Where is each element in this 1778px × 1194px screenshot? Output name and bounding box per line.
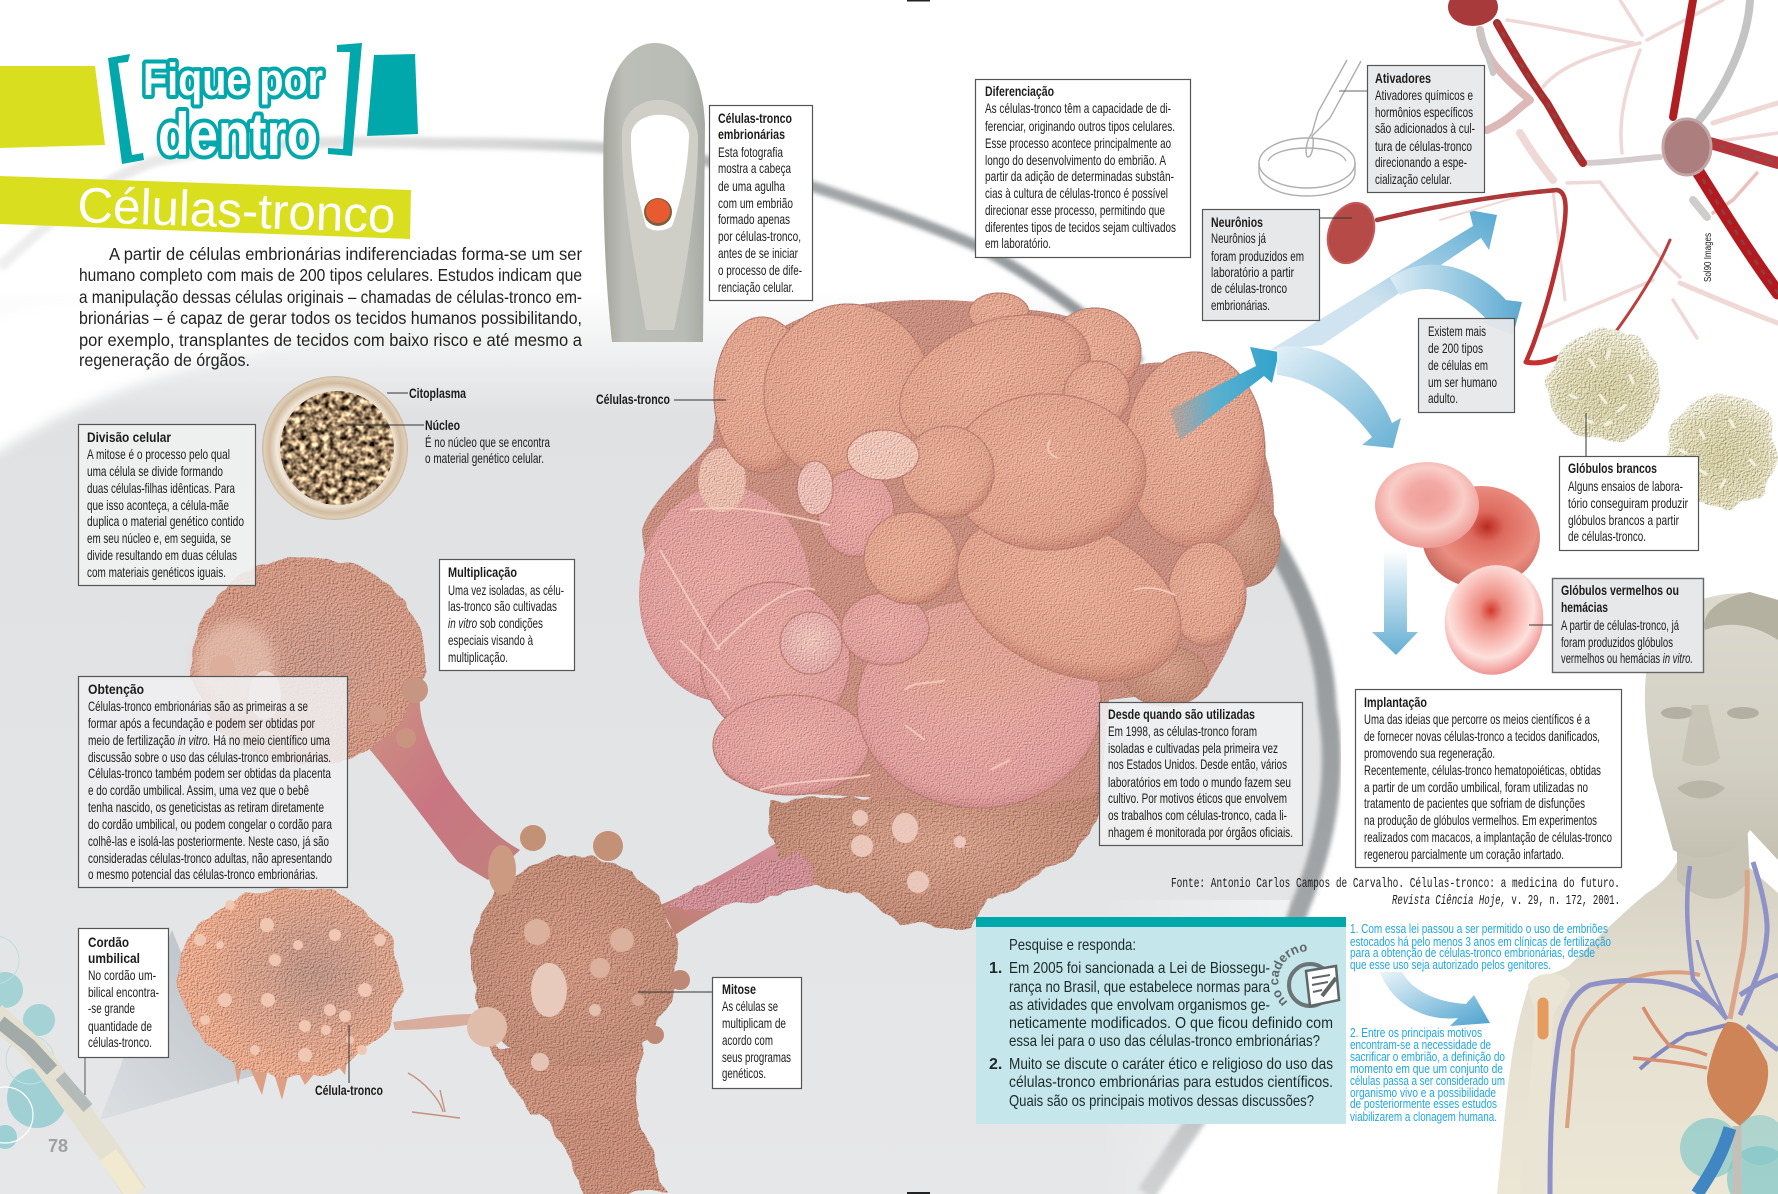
panel: Neurônios — [1202, 210, 1352, 320]
answer 2: 2. Entre os principais motivos — [1350, 1026, 1482, 1040]
panel: Desde quando são utilizadas: Em 1998, as células-tronco foram — [1108, 724, 1257, 739]
panel: Divisão celular: que isso aconteça, a célula-mãe — [87, 498, 229, 513]
answer 2: viabilizarem a clonagem humana. — [1350, 1110, 1497, 1124]
panel: Desde quando são utilizadas: cultivo. Por motivos éticos que envolvem — [1108, 791, 1287, 806]
panel: Neurônios: foram produzidos em — [1211, 249, 1304, 264]
panel: Ativadores: são adicionados à cul- — [1375, 121, 1475, 136]
panel: Desde quando são utilizadas — [1100, 702, 1302, 846]
panel: Cordão umbilical: No cordão um- — [88, 968, 156, 983]
icon: no caderno — [1271, 944, 1340, 1008]
panel: Obtenção: do cordão umbilical, ou podem congelar o cordão para — [88, 817, 332, 832]
panel: Implantação: Uma das ideias que percorre os meios científicos é a — [1364, 712, 1590, 727]
panel: Existem mais de 200 tipos — [1418, 318, 1514, 412]
panel: Desde quando são utilizadas: laboratórios em todo o mundo fazem seu — [1108, 775, 1291, 790]
label: Núcleo: É no núcleo que se encontra — [425, 435, 550, 450]
panel: Implantação: Implantação — [1364, 695, 1427, 710]
answer 2: momento em que um conjunto de — [1350, 1062, 1503, 1076]
panel: Divisão celular: duplica o material genético contido — [87, 514, 244, 529]
stem cell tails — [366, 695, 840, 1194]
panel: Desde quando são utilizadas: nhagem é monitorada por órgãos oficiais. — [1108, 825, 1293, 840]
arrow: to neurons — [1270, 210, 1497, 350]
panel: Obtenção: colhê-las e isolá-las posteriormente. Neste caso, já são — [88, 834, 329, 849]
panel: Glóbulos vermelhos ou hemácias: Glóbulos vermelhos ou — [1561, 583, 1679, 598]
panel: Ativadores: Ativadores — [1375, 71, 1431, 86]
arrow: main differentiation — [1170, 347, 1279, 440]
panel: Divisão celular: duas células-filhas idênticas. Para — [87, 481, 235, 496]
crop marks — [907, 0, 930, 1194]
answer 2: organismo vivo e a possibilidade — [1350, 1086, 1496, 1100]
intro paragraph: humano completo com mais de 200 tipos celulares. Estudos indicam que — [79, 265, 582, 285]
intro paragraph: por exemplo, transplantes de tecidos com baixo risco e até mesmo a — [79, 330, 582, 350]
panel: Pesquise e responda: Em 2005 foi sancionada a Lei de Biossegu- — [1009, 960, 1270, 977]
panel: Neurônios: embrionárias. — [1211, 298, 1270, 313]
panel: Pesquise e responda — [976, 917, 1346, 1124]
panel: Multiplicação: Multiplicação — [448, 565, 517, 580]
label: Citoplasma: Citoplasma — [409, 386, 466, 401]
white blood cells — [1549, 330, 1778, 506]
answer 2: células passa a ser considerado um — [1350, 1074, 1505, 1088]
panel: Diferenciação: diferentes tipos de tecidos sejam cultivados — [985, 220, 1176, 235]
panel: Divisão celular: com materiais genéticos iguais. — [87, 565, 226, 580]
panel: Pesquise e responda: Pesquise e responda: — [1009, 937, 1136, 954]
panel: Desde quando são utilizadas: os trabalhos com células-tronco, cada li- — [1108, 808, 1287, 823]
intro paragraph — [79, 244, 582, 370]
panel: Neurônios: laboratório a partir — [1211, 265, 1294, 280]
panel: Células-tronco embrionárias: Esta fotografia — [718, 145, 783, 160]
intro paragraph: a manipulação dessas células originais – chamadas de células-tronco em- — [79, 287, 582, 307]
panel: Ativadores: Ativadores químicos e — [1375, 88, 1473, 103]
label: Núcleo: o material genético celular. — [425, 451, 544, 466]
stem cell: upper left — [192, 556, 428, 764]
page number: 78 — [48, 1136, 68, 1156]
panel: Obtenção: Células-tronco também podem ser obtidas da placenta — [88, 766, 331, 781]
panel: Diferenciação — [976, 80, 1190, 258]
panel: Pesquise e responda: 2. — [989, 1056, 1002, 1073]
panel: Divisão celular: em seu núcleo e, em seguida, se — [87, 531, 231, 546]
panel: Cordão umbilical: quantidade de — [88, 1019, 152, 1034]
panel: Divisão celular — [78, 424, 256, 586]
panel: Existem mais de 200 tipos: Existem mais — [1428, 324, 1486, 339]
panel: Multiplicação: Uma vez isoladas, as célu- — [448, 583, 564, 598]
panel: Glóbulos brancos: Glóbulos brancos — [1568, 461, 1657, 476]
label: Citoplasma — [387, 386, 466, 401]
panel: Pesquise e responda: 1. — [989, 960, 1002, 977]
arrow: to white blood cells — [1390, 265, 1522, 335]
panel: Divisão celular: divide resultando em duas células — [87, 548, 237, 563]
panel: Ativadores: hormônios específicos — [1375, 105, 1473, 120]
panel: Glóbulos brancos: Alguns ensaios de labora- — [1568, 479, 1683, 494]
panel: Células-tronco embrionárias: com um embrião — [718, 196, 793, 211]
panel: Pesquise e responda: Muito se discute o caráter ético e religioso do uso das — [1009, 1056, 1333, 1073]
arrow: to red blood cells — [1277, 346, 1401, 448]
panel: Implantação: promovendo sua regeneração. — [1364, 746, 1495, 761]
panel: Obtenção: Obtenção — [88, 682, 144, 697]
panel: Multiplicação: las-tronco são cultivadas — [448, 599, 557, 614]
panel: Diferenciação: direcionar esse processo, permitindo que — [985, 203, 1165, 218]
title tab: Fique por dentro: dentro — [158, 101, 318, 168]
panel: Mitose — [638, 978, 802, 1088]
panel: Implantação: regenerou parcialmente um coração infartado. — [1364, 847, 1564, 862]
panel: Obtenção: Células-tronco embrionárias são as primeiras a se — [88, 699, 308, 714]
panel: Diferenciação: partir da adição de determinadas substân- — [985, 169, 1174, 184]
panel: Existem mais de 200 tipos: um ser humano — [1428, 375, 1497, 390]
answer 1: que esse uso seja autorizado pelos genitores. — [1350, 958, 1551, 972]
panel: Pesquise e responda: neticamente modificados. O que ficou definido com — [1009, 1015, 1333, 1032]
answer 2: encontram-se a necessidade de — [1350, 1038, 1491, 1052]
panel: Glóbulos vermelhos ou hemácias: foram produzidos glóbulos — [1561, 635, 1673, 650]
panel: Desde quando são utilizadas: Desde quando são utilizadas — [1108, 707, 1255, 722]
panel: Células-tronco embrionárias: mostra a cabeça — [718, 161, 791, 176]
answer 2: de posteriormente esses estudos — [1350, 1097, 1497, 1111]
panel: Glóbulos vermelhos ou hemácias: vermelhos ou hemácias in vitro. — [1561, 651, 1693, 666]
icon: petri dish and pipette — [1259, 60, 1361, 196]
panel: Glóbulos vermelhos ou hemácias: hemácias — [1561, 600, 1608, 615]
panel: Neurônios: Neurônios — [1211, 215, 1263, 230]
panel: Células-tronco embrionárias: de uma agulha — [718, 179, 785, 194]
main stem cell mass — [639, 289, 1280, 930]
neurons illustration — [1320, 0, 1778, 363]
panel: Desde quando são utilizadas: isoladas e cultivadas pela primeira vez — [1108, 741, 1278, 756]
panel: Implantação: de fornecer novas células-tronco a tecidos danificados, — [1364, 729, 1600, 744]
heading: Células-tronco: Células-tronco — [77, 177, 396, 244]
arrow: down to implantation — [1372, 550, 1418, 655]
umbilical cord with teal circles — [0, 936, 136, 1194]
panel: Multiplicação — [440, 560, 574, 670]
panel: Obtenção: meio de fertilização in vitro. Há no meio científico uma — [88, 733, 330, 748]
panel: Células-tronco embrionárias: o processo de dife- — [718, 263, 802, 278]
panel: Multiplicação: in vitro sob condições — [448, 616, 543, 631]
panel: Ativadores: tura de células-tronco — [1375, 139, 1472, 154]
panel: Diferenciação: cias à cultura de células-tronco é possível — [985, 186, 1168, 201]
panel: Divisão celular: A mitose é o processo pelo qual — [87, 447, 230, 462]
label: Células-tronco: Células-tronco — [596, 392, 670, 407]
panel: Células-tronco embrionárias: formado apenas — [718, 212, 790, 227]
intro paragraph: A partir de células embrionárias indiferenciadas forma-se um ser — [109, 244, 582, 264]
panel: Pesquise e responda: células-tronco embrionárias para estudos científicos. — [1009, 1074, 1333, 1091]
panel: Diferenciação: longo do desenvolvimento do embrião. A — [985, 153, 1167, 168]
panel: Implantação: a partir de um cordão umbilical, foram utilizadas no — [1364, 780, 1588, 795]
answer 2: sacrificar o embrião, a definição do — [1350, 1050, 1505, 1064]
panel: Cordão umbilical: células-tronco. — [88, 1035, 152, 1050]
stem cell: lower left — [180, 887, 400, 1100]
panel: Ativadores — [1339, 66, 1484, 192]
answer 1 — [1350, 922, 1611, 972]
intro paragraph: brionárias – é capaz de gerar todos os tecidos humanos possibilitando, — [79, 308, 582, 328]
panel: Pesquise e responda: rança no Brasil, que estabelece normas para — [1009, 979, 1270, 996]
panel: Implantação — [1356, 690, 1622, 868]
stem cell: middle (mitosis) — [467, 825, 690, 1115]
label: Núcleo — [346, 418, 550, 466]
nucleus cell photo — [262, 376, 408, 520]
panel: Existem mais de 200 tipos: de células em — [1428, 358, 1488, 373]
answer 1: para a obtenção de células-tronco embrionárias, desde — [1350, 946, 1595, 960]
panel: Mitose: genéticos. — [722, 1066, 766, 1081]
panel: Divisão celular: Divisão celular — [87, 430, 172, 445]
panel: Neurônios: de células-tronco — [1211, 281, 1287, 296]
panel: Ativadores: direcionando a espe- — [1375, 155, 1467, 170]
panel: Pesquise e responda: Quais são os principais motivos dessas discussões? — [1009, 1093, 1314, 1110]
panel: Células-tronco embrionárias: por células-tronco, — [718, 229, 801, 244]
source citation — [1171, 876, 1620, 909]
panel: Células-tronco embrionárias — [710, 106, 812, 300]
panel: Desde quando são utilizadas: nos Estados Unidos. Desde então, vários — [1108, 757, 1287, 772]
panel: Obtenção: consideradas células-tronco adultas, não apresentando — [88, 851, 332, 866]
panel: Glóbulos vermelhos ou hemácias: A partir de células-tronco, já — [1561, 618, 1679, 633]
panel: Cordão umbilical: umbilical — [88, 951, 140, 966]
panel: Diferenciação: em laboratório. — [985, 236, 1051, 251]
panel: Mitose: Mitose — [722, 982, 756, 997]
red blood cells — [1375, 462, 1553, 684]
panel: Multiplicação: especiais visando à — [448, 633, 533, 648]
panel: Glóbulos vermelhos ou hemácias — [1529, 578, 1704, 672]
panel: Cordão umbilical: -se grande — [88, 1001, 135, 1016]
panel: Mitose: As células se — [722, 999, 778, 1014]
panel: Células-tronco embrionárias: antes de se iniciar — [718, 246, 798, 261]
panel: Células-tronco embrionárias: renciação celular. — [718, 280, 794, 295]
panel: Obtenção: tenha nascido, os geneticistas as retiram diretamente — [88, 800, 324, 815]
panel: Células-tronco embrionárias: Células-tronco — [718, 111, 792, 126]
panel: Implantação: Recentemente, células-tronco hematopoiéticas, obtidas — [1364, 763, 1601, 778]
panel: Pesquise e responda: as atividades que envolvam organismos ge- — [1009, 997, 1270, 1014]
panel: Mitose: seus programas — [722, 1050, 791, 1065]
panel: Implantação: realizados com macacos, a implantação de células-tronco — [1364, 830, 1612, 845]
corner tag: Sol90 Images: Sol90 Images — [1702, 233, 1714, 282]
mannequin body with circulatory system — [1497, 592, 1778, 1194]
panel: Cordão umbilical: bilical encontra- — [88, 985, 159, 1000]
answer 1: estocados há pelo menos 3 anos em clínicas de fertilização — [1350, 935, 1611, 949]
panel: Existem mais de 200 tipos: adulto. — [1428, 391, 1458, 406]
answer 2 — [1350, 1026, 1505, 1124]
panel: Glóbulos brancos: de células-tronco. — [1568, 529, 1646, 544]
panel: Diferenciação: As células-tronco têm a capacidade de di- — [985, 101, 1171, 116]
panel: Existem mais de 200 tipos: de 200 tipos — [1428, 341, 1483, 356]
panel: Implantação: tratamento de pacientes que sofriam de disfunções — [1364, 796, 1585, 811]
panel: Obtenção: e do cordão umbilical. Assim, uma vez que o bebê — [88, 783, 309, 798]
title tab: Fique por dentro: Fique por — [143, 54, 323, 105]
panel: Cordão umbilical — [78, 928, 168, 1095]
icon: no caderno: no caderno — [1271, 944, 1307, 1006]
answer 1: 1. Com essa lei passou a ser permitido o uso de embriões — [1350, 922, 1608, 936]
panel: Glóbulos brancos: tório conseguiram produzir — [1568, 496, 1688, 511]
panel: Divisão celular: uma célula se divide formando — [87, 464, 223, 479]
panel: Multiplicação: multiplicação. — [448, 650, 508, 665]
panel: Ativadores: cialização celular. — [1375, 172, 1452, 187]
panel: Mitose: acordo com — [722, 1033, 773, 1048]
needle photo — [603, 43, 705, 342]
title tab: Fique por dentro — [0, 43, 418, 168]
panel: Pesquise e responda: essa lei para o uso das células-tronco embrionárias? — [1009, 1033, 1320, 1050]
panel: Diferenciação: ferenciar, originando outros tipos celulares. — [985, 119, 1175, 134]
panel: Obtenção — [78, 676, 348, 888]
panel: Mitose: multiplicam de — [722, 1016, 786, 1031]
panel: Glóbulos brancos — [1560, 413, 1698, 550]
label: Célula-tronco: Célula-tronco — [315, 1083, 383, 1098]
panel: Diferenciação: Diferenciação — [985, 84, 1054, 99]
panel: Obtenção: discussão sobre o uso das células-tronco embrionárias. — [88, 750, 331, 765]
label: Célula-tronco — [315, 1025, 383, 1098]
panel: Diferenciação: Esse processo acontece principalmente ao — [985, 136, 1171, 151]
panel: Glóbulos brancos: glóbulos brancos a partir — [1568, 513, 1679, 528]
panel: Obtenção: formar após a fecundação e podem ser obtidas por — [88, 716, 315, 731]
panel: Obtenção: o mesmo potencial das células-tronco embrionárias. — [88, 867, 318, 882]
panel: Cordão umbilical: Cordão — [88, 935, 129, 950]
panel: Neurônios: Neurônios já — [1211, 231, 1266, 246]
arrow: between answers — [1380, 972, 1490, 1026]
source citation: Revista Ciência Hoje, v. 29, n. 172, 2001. — [1392, 893, 1620, 909]
panel: Células-tronco embrionárias: embrionárias — [718, 127, 785, 142]
panel: Implantação: na produção de glóbulos vermelhos. Em experimentos — [1364, 813, 1597, 828]
shadow cone from cord to cell — [100, 930, 280, 1120]
intro paragraph: regeneração de órgãos. — [79, 350, 250, 370]
label: Núcleo: Núcleo — [425, 418, 460, 433]
